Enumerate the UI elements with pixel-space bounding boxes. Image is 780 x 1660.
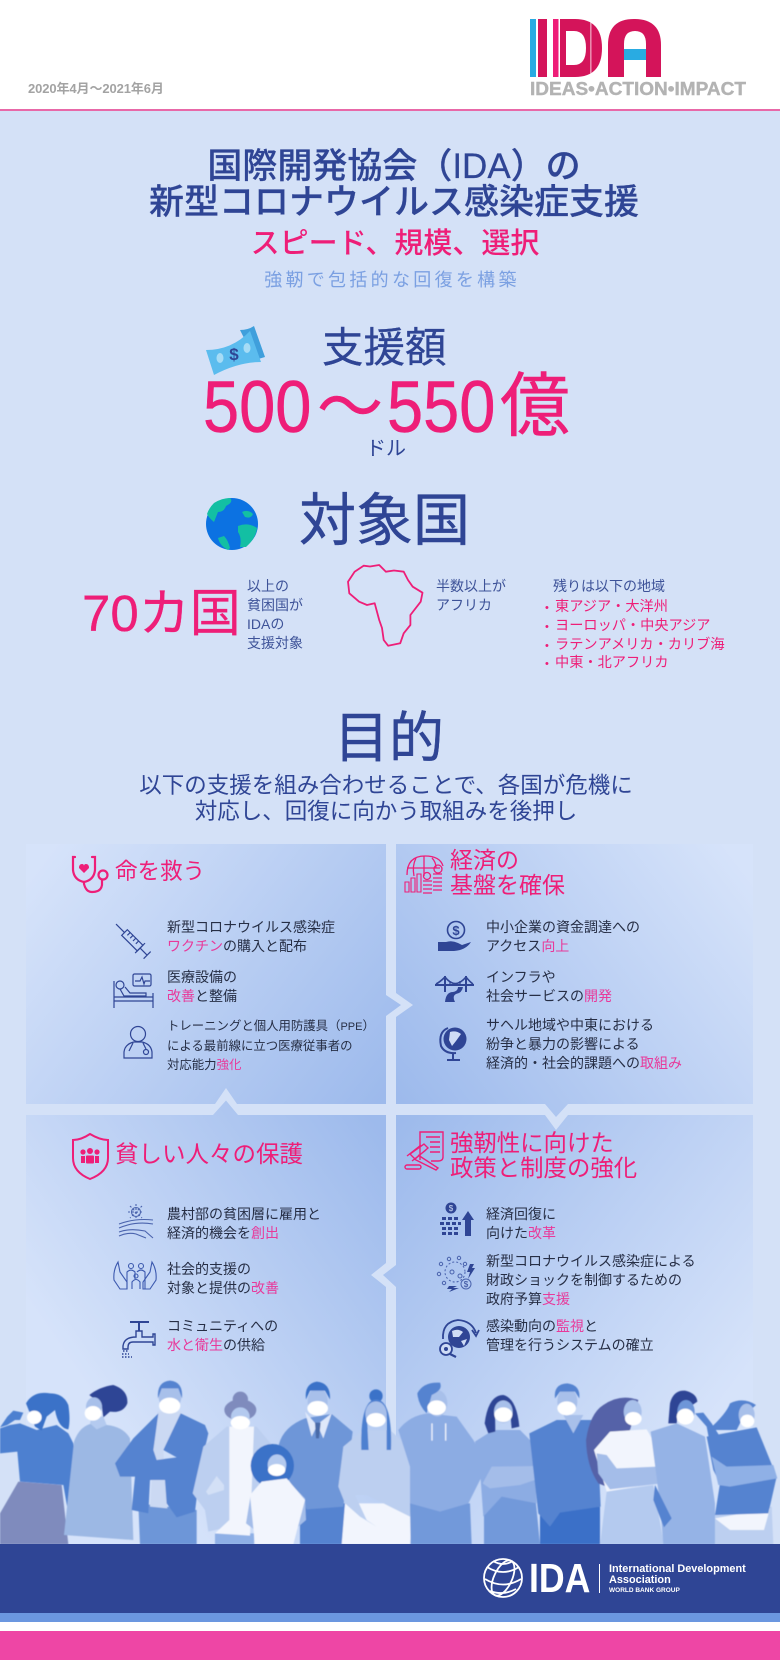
text: fiscal support: 財政ショックを制御するための [486, 1272, 682, 1288]
text: water and sanitation [167, 1318, 278, 1353]
IDA logo [530, 19, 746, 99]
text: water and sanitation: 水と衛生の供給 [167, 1337, 265, 1353]
divider [599, 1564, 600, 1593]
organisation name: Association [609, 1574, 671, 1586]
text: social support: 対象と提供の改善 [167, 1280, 279, 1296]
text: fragility and conflict: 紛争と暴力の影響による [486, 1036, 640, 1052]
amount figure: 550 [387, 367, 495, 448]
icon: globe with coins [405, 856, 443, 893]
text: infrastructure: インフラや [486, 969, 556, 985]
organisation name: International Development [609, 1563, 746, 1575]
tagline pink: スピード、規模、選択 [251, 228, 539, 260]
amount figure [203, 367, 570, 448]
panel: top right background [396, 844, 753, 1117]
icon: bridge over road [435, 976, 474, 1002]
heading: purpose: 目的 [334, 707, 444, 769]
text: health worker training: 対応能力強化 [167, 1058, 241, 1072]
text: other regions list: 中東・北アフリカ [555, 655, 669, 671]
amount figure: 〜 [317, 370, 383, 444]
person: older woman with bun [193, 1392, 277, 1544]
text: SME finance: 中小企業の資金調達への [486, 919, 640, 935]
text: reforms [486, 1206, 556, 1241]
icon: syringe [111, 919, 152, 960]
panel heading: economic foundation [450, 847, 565, 898]
icon: hospital bed with monitor [114, 974, 153, 1008]
illustration: masked crowd [0, 1381, 777, 1544]
icon: virus with coin and lightning: $ [464, 1280, 469, 1289]
panel heading: economic foundation: 経済の [450, 847, 519, 873]
panel heading: economic foundation: 基盤を確保 [450, 872, 565, 898]
text: other regions list: • [545, 658, 549, 670]
heading: target countries: 対象国 [299, 489, 470, 553]
amount figure: 500 [203, 367, 311, 448]
text: eligible countries note: 以上の [247, 578, 289, 594]
text: reforms: 経済回復に [486, 1206, 556, 1222]
text: SME finance: アクセス向上 [486, 938, 569, 954]
person: woman with long hair and bun [338, 1389, 413, 1544]
text: health worker training: トレーニングと個人用防護具（PPE） [167, 1019, 375, 1033]
unit: dollars: ドル [366, 438, 406, 460]
text: other regions list: 東アジア・大洋州 [555, 599, 668, 615]
person: man with crossed arms and jacket [115, 1381, 208, 1544]
amount figure: 億 [500, 367, 570, 445]
person: woman with wind-blown hair [707, 1400, 777, 1544]
footer logo wordmark [529, 1555, 746, 1601]
heading: support amount: 支援額 [322, 324, 447, 371]
group name: WORLD BANK GROUP [609, 1587, 680, 1594]
text: water and sanitation: コミュニティへの [167, 1318, 278, 1334]
text: eligible countries note: IDAの [247, 616, 284, 632]
icon: desk globe [440, 1028, 466, 1060]
person: man in blue sweater [529, 1383, 601, 1544]
text: health worker training [167, 1019, 375, 1072]
person: woman with long flowing hair [586, 1398, 668, 1544]
date range: 2020年4月～2021年6月 [28, 81, 164, 96]
icon: globe with magnifier [440, 1320, 479, 1357]
person: woman with curly hair [64, 1385, 133, 1540]
icon: money bill: $ [229, 345, 239, 364]
text: fiscal support: 政府予算支援 [486, 1291, 570, 1307]
text: purpose description [139, 773, 633, 824]
person: young girl with curly hair [246, 1444, 306, 1544]
subtitle: 強靭で包括的な回復を構築 [264, 270, 520, 290]
text: over half in Africa [436, 578, 506, 613]
text: vaccines [167, 919, 335, 954]
text: fiscal support [486, 1253, 696, 1307]
text: rural jobs [167, 1206, 321, 1241]
text: purpose description: 対応し、回復に向かう取組みを後押し [195, 799, 577, 824]
panel: top left background [26, 844, 401, 1104]
text: SME finance [486, 919, 640, 954]
icon: family in hands [114, 1262, 156, 1289]
icon: gavel and document [405, 1132, 443, 1170]
text: infrastructure [486, 969, 612, 1004]
icon: stethoscope with heart [73, 857, 108, 892]
icon: sun over fields [119, 1204, 153, 1238]
panel heading: resilience policy: 政策と制度の強化 [450, 1155, 637, 1181]
person: woman with dark wavy hair [475, 1395, 545, 1544]
header band [0, 0, 780, 111]
text: over half in Africa: アフリカ [436, 597, 492, 613]
text: medical equipment: 医療設備の [167, 969, 237, 985]
text: vaccines: ワクチンの購入と配布 [167, 938, 307, 954]
panel heading: protecting the poor: 貧しい人々の保護 [115, 1141, 303, 1167]
text: social support [167, 1261, 279, 1296]
title [149, 147, 639, 222]
panel: bottom right background [383, 1115, 753, 1544]
text: medical equipment: 改善と整備 [167, 988, 237, 1004]
icon: medical worker [124, 1026, 152, 1058]
icon: earth globe [206, 498, 258, 550]
text: over half in Africa: 半数以上が [436, 578, 506, 594]
icon: water tap [122, 1322, 155, 1357]
text: rural jobs: 経済的機会を創出 [167, 1225, 279, 1241]
icon: money bill [206, 326, 265, 375]
text: eligible countries note: 支援対象 [247, 635, 303, 651]
text: eligible countries note: 貧困国が [247, 597, 303, 613]
text: medical equipment [167, 969, 237, 1004]
text: other regions list: • [545, 640, 549, 652]
panel heading: resilience policy: 強靭性に向けた [450, 1130, 614, 1156]
text: fragility and conflict: 経済的・社会的課題への取組み [486, 1055, 682, 1071]
text: other regions list [545, 578, 725, 671]
icon: coin bricks and up arrow [440, 1202, 474, 1236]
text: purpose description: 以下の支援を組み合わせることで、各国が危機に [139, 773, 633, 798]
text: other regions list: • [545, 602, 549, 614]
text: infrastructure: 社会サービスの開発 [486, 988, 612, 1004]
text: other regions list: 残りは以下の地域 [553, 578, 665, 594]
icon: shield with people [73, 1134, 108, 1179]
organisation name [609, 1563, 746, 1586]
text: social support: 社会的支援の [167, 1261, 251, 1277]
text: fragility and conflict: サヘル地域や中東における [486, 1017, 654, 1033]
text: reforms: 向けた改革 [486, 1225, 556, 1241]
text: other regions list: ラテンアメリカ・カリブ海 [555, 637, 725, 653]
text: other regions list: • [545, 621, 549, 633]
icon: coin bricks and up arrow: $ [449, 1204, 454, 1213]
text: health worker training: による最前線に立つ医療従事者の [167, 1039, 352, 1053]
icon: virus with coin and lightning [437, 1256, 475, 1292]
title: 国際開発協会（IDA）の [207, 147, 581, 186]
text: fragility and conflict [486, 1017, 682, 1071]
IDA logo: IDEAS•ACTION•IMPACT [530, 79, 746, 99]
text: monitoring [486, 1318, 654, 1353]
text: rural jobs: 農村部の貧困層に雇用と [167, 1206, 321, 1222]
footer bands [0, 1544, 780, 1660]
text: vaccines: 新型コロナウイルス感染症 [167, 919, 335, 935]
wordmark IDA: IDA [529, 1555, 590, 1601]
title: 新型コロナウイルス感染症支援 [149, 183, 639, 222]
icon: World Bank globe [484, 1557, 522, 1599]
person: woman with ponytail [0, 1393, 77, 1544]
text: monitoring: 感染動向の監視と [486, 1318, 598, 1334]
text: fiscal support: 新型コロナウイルス感染症による [486, 1253, 696, 1269]
icon: Africa outline [348, 565, 422, 646]
panel: bottom left background [26, 1100, 386, 1544]
text: eligible countries note [247, 578, 303, 651]
person: man in vest and tie [279, 1382, 353, 1544]
panel heading: resilience policy [450, 1130, 637, 1181]
text: monitoring: 管理を行うシステムの確立 [486, 1337, 654, 1353]
icon: hand with coin [438, 922, 471, 951]
icon: hand with coin: $ [452, 923, 460, 938]
panel heading: save lives: 命を救う [115, 859, 205, 884]
person: man adjusting mask [651, 1391, 728, 1544]
text: other regions list: ヨーロッパ・中央アジア [555, 618, 710, 634]
person: man in hoodie [398, 1383, 488, 1544]
stat: 70 countries: 70カ国 [82, 585, 241, 642]
